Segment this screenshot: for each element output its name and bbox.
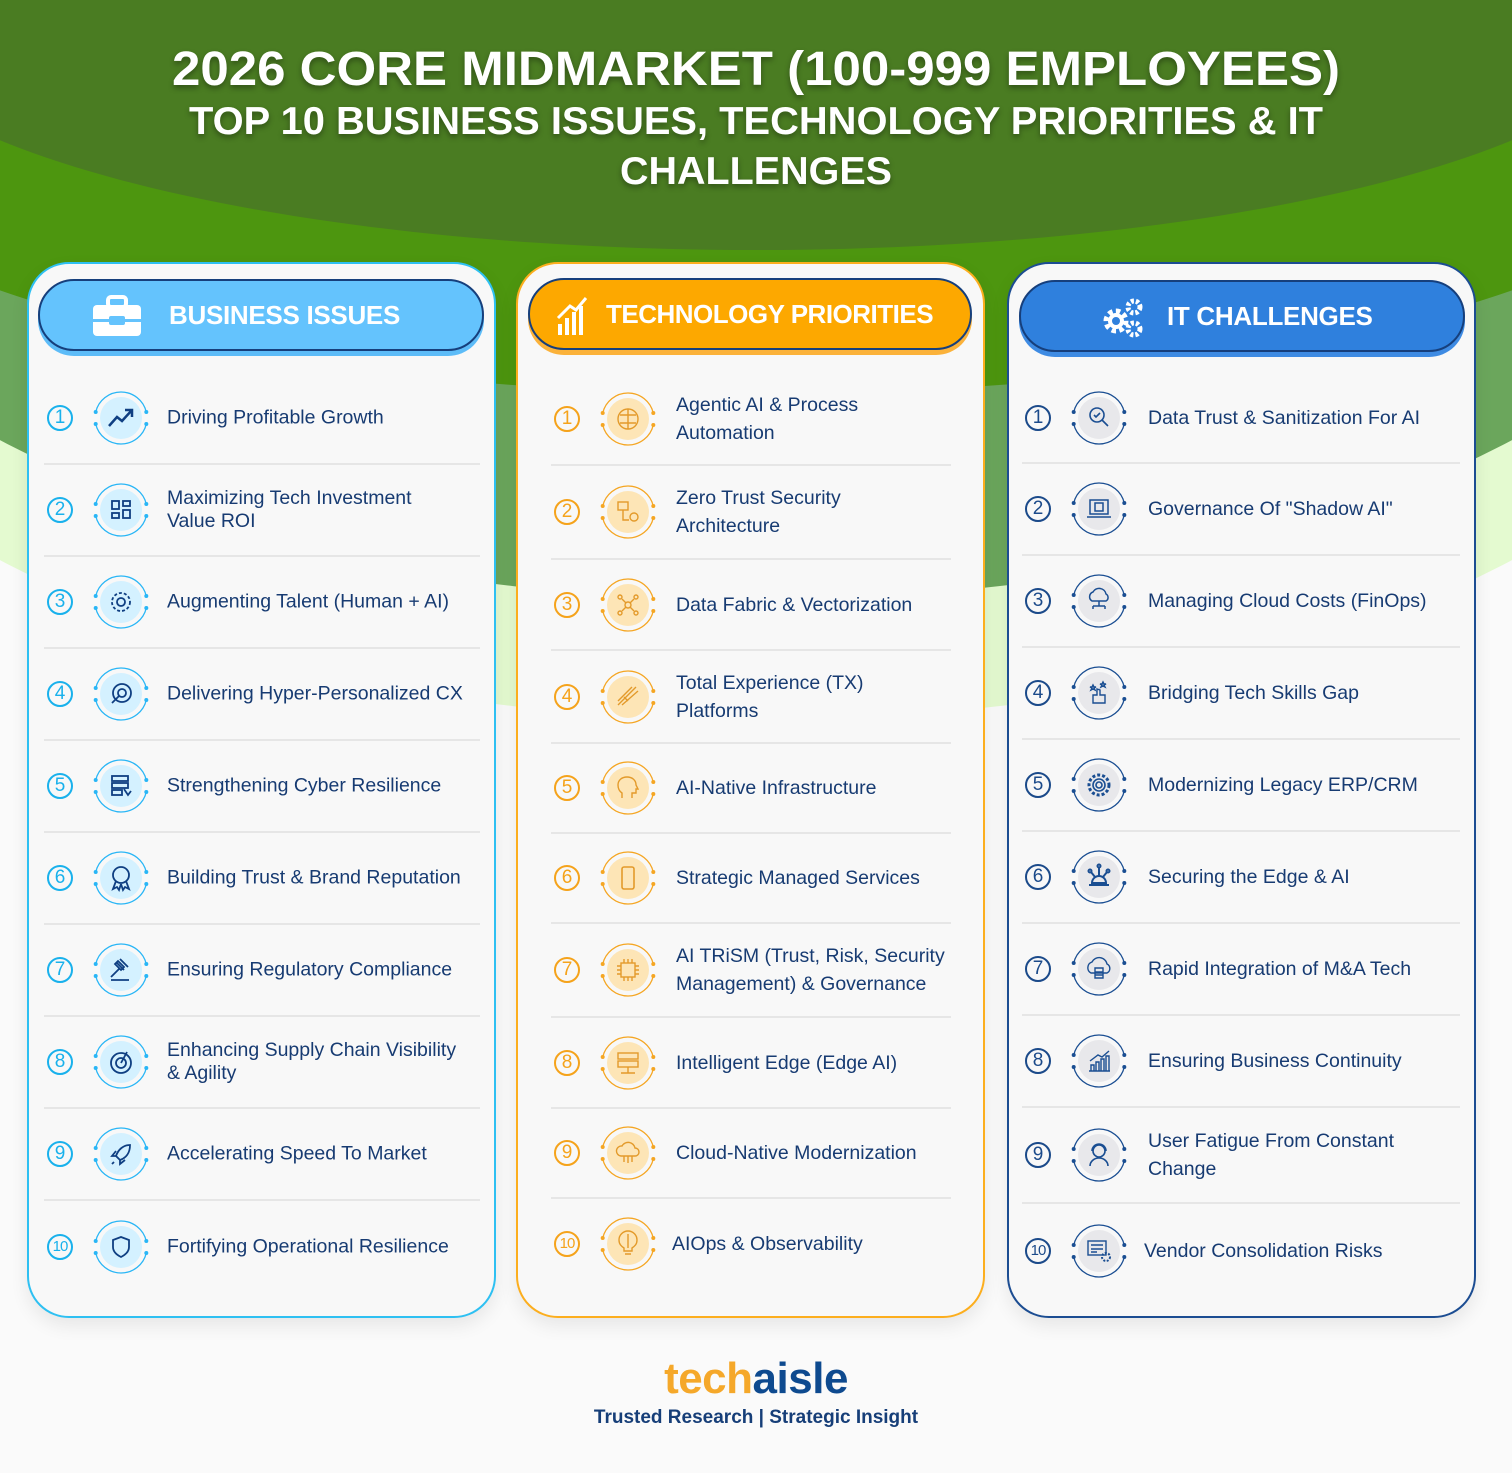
icon: gears [1104,298,1142,338]
panel: business issues [27,262,496,1318]
list: technology priorities [551,392,951,1271]
item 4: 4 [562,686,572,706]
item 2 [1022,464,1460,556]
item 9: 9 [1033,1144,1043,1165]
item 10: Fortifying Operational Resilience [167,1236,449,1258]
header: business issues [38,279,484,351]
item 4 [44,649,480,741]
item 10: 10 [1031,1242,1045,1258]
item 8: 8 [55,1051,65,1072]
item 5: Strengthening Cyber Resilience [167,774,441,796]
item 9: Accelerating Speed To Market [167,1142,427,1164]
item 1: 1 [55,407,65,428]
item 8: 8 [562,1052,572,1072]
item 1: Driving Profitable Growth [167,406,384,428]
item 4: Delivering Hyper-Personalized CX [167,682,463,704]
item 1: 1 [1033,406,1043,428]
header: business issues: BUSINESS ISSUES [169,300,400,330]
item 5: Modernizing Legacy ERP/CRM [1148,774,1418,796]
item 4 [551,651,951,744]
item 1: 1 [562,408,572,429]
item 6: Securing the Edge & AI [1148,866,1350,888]
item 7 [551,924,951,1018]
item 8: Ensuring Business Continuity [1148,1050,1402,1072]
item 8 [44,1017,480,1109]
icon: chart [557,297,588,335]
item 3: Data Fabric & Vectorization [676,594,912,616]
item 4: Total Experience (TX) [676,672,864,694]
item 2: Architecture [676,515,780,537]
item 6 [551,834,951,924]
item 7: 7 [55,959,65,980]
item 7: Management) & Governance [676,973,926,995]
item 9 [1022,1108,1460,1204]
item 5 [1022,740,1460,832]
item 7: 7 [1033,958,1043,979]
item 2: Maximizing Tech Investment [167,487,412,509]
item 10 [47,1220,449,1274]
item 7: Rapid Integration of M&A Tech [1148,958,1411,980]
item 6 [1022,832,1460,924]
item 2: 2 [55,499,65,520]
item 9: Cloud-Native Modernization [676,1142,917,1164]
item 2 [44,465,480,557]
item 8: 8 [1033,1050,1043,1071]
item 5 [44,741,480,833]
item 4: Platforms [676,700,758,722]
item 8 [1022,1016,1460,1108]
item 2: Zero Trust Security [676,487,841,509]
item 1 [1022,373,1460,464]
footer tagline: Trusted Research | Strategic Insight [594,1407,918,1428]
item 8 [551,1018,951,1109]
item 3: 3 [55,591,65,612]
item 3: 3 [562,594,572,614]
title [172,43,1340,193]
item 6: 6 [55,867,65,888]
item 3: 3 [1033,590,1043,611]
item 6: Strategic Managed Services [676,867,920,889]
header: technology priorities: TECHNOLOGY PRIORITIES [606,298,933,328]
item 10: Vendor Consolidation Risks [1144,1240,1382,1262]
item 1: Agentic AI & Process [676,394,858,416]
item 9: 9 [55,1143,65,1164]
panel: it challenges [1007,262,1476,1318]
item 6 [44,833,480,925]
footer logo: techaisle: techaisle [664,1354,848,1403]
title: 2026 CORE MIDMARKET (100-999 EMPLOYEES) [172,43,1340,96]
item 4 [1022,648,1460,740]
item 1: Data Trust & Sanitization For AI [1148,406,1420,428]
item 2: Governance Of "Shadow AI" [1148,498,1393,520]
header: it challenges: IT CHALLENGES [1167,300,1373,330]
item 9: 9 [562,1142,572,1163]
title: TOP 10 BUSINESS ISSUES, TECHNOLOGY PRIORITIES & IT [189,100,1323,143]
item 9: Change [1148,1158,1216,1180]
item 3: Augmenting Talent (Human + AI) [167,590,449,612]
item 6: Building Trust & Brand Reputation [167,866,461,888]
item 3 [551,560,951,651]
item 4: 4 [1033,682,1043,703]
item 4: Bridging Tech Skills Gap [1148,682,1359,704]
item 10: 10 [53,1238,67,1255]
item 5 [551,744,951,834]
item 10: AIOps & Observability [672,1233,863,1255]
item 7: AI TRiSM (Trust, Risk, Security [676,945,945,967]
item 1 [551,374,951,466]
item 1 [44,373,480,465]
item 7: 7 [562,959,572,980]
header: it challenges [1019,280,1465,352]
list: it challenges [1022,391,1460,1278]
item 4: 4 [55,683,65,704]
item 7 [1022,924,1460,1016]
item 8: Enhancing Supply Chain Visibility [167,1039,456,1061]
title: CHALLENGES [620,150,892,193]
item 10 [554,1217,863,1271]
item 2: 2 [562,501,572,522]
icon: briefcase [93,295,141,336]
item 2 [551,466,951,560]
item 8: & Agility [167,1062,236,1084]
item 2: Value ROI [167,510,256,532]
header: technology priorities [528,278,972,350]
item 10 [1025,1224,1382,1278]
item 7 [44,925,480,1017]
item 9 [44,1109,480,1201]
item 6: 6 [1033,866,1043,887]
item 5: 5 [562,777,572,798]
item 3: Managing Cloud Costs (FinOps) [1148,590,1427,612]
item 1: Automation [676,422,775,444]
item 5: AI-Native Infrastructure [676,777,876,799]
item 6: 6 [562,867,572,888]
item 2: 2 [1033,498,1043,519]
item 10: 10 [560,1235,574,1252]
item 9 [551,1109,951,1199]
item 8: Intelligent Edge (Edge AI) [676,1052,897,1074]
item 3 [44,557,480,649]
item 7: Ensuring Regulatory Compliance [167,958,452,980]
item 9: User Fatigue From Constant [1148,1130,1394,1152]
item 5: 5 [55,775,65,796]
panel: technology priorities [516,262,985,1318]
item 3 [1022,556,1460,648]
list: business issues [44,391,480,1274]
item 5: 5 [1033,774,1043,795]
